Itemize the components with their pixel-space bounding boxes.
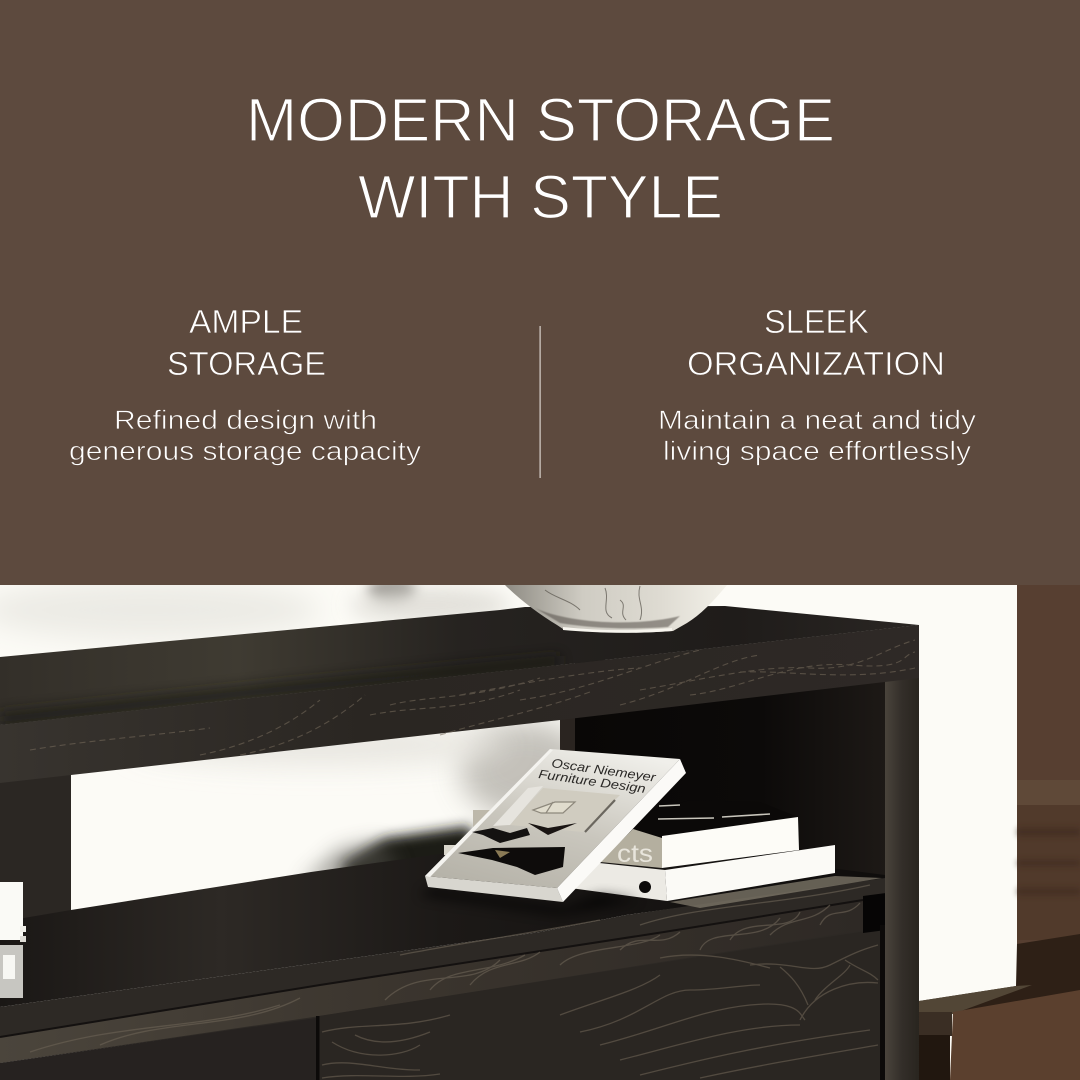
divider (540, 326, 541, 478)
lower shelf top (0, 860, 885, 1007)
title: MODERN STORAGE (246, 86, 835, 154)
book: Oscar Niemeyer (425, 749, 686, 902)
bowl (505, 585, 727, 633)
feature: ample storage: AMPLE (189, 303, 303, 340)
left decor object (0, 882, 26, 998)
feature: sleek organization (658, 303, 977, 466)
book: upper (600, 800, 799, 868)
stacked books (444, 800, 882, 908)
feature: ample storage: STORAGE (167, 345, 326, 382)
feature: sleek organization: Maintain a neat and tidy (658, 405, 977, 435)
cabinet doors (0, 893, 886, 1080)
front rail (0, 878, 885, 1063)
right post (885, 678, 919, 1080)
feature: ample storage: Refined design with (114, 405, 377, 435)
right wood wall (1013, 585, 1080, 944)
panel: furniture scene (0, 578, 1080, 1080)
book: lower (444, 810, 882, 908)
title (246, 86, 835, 231)
inner back panel (560, 660, 885, 885)
wood step (919, 934, 1080, 1080)
book: upper: cts (617, 840, 653, 868)
book shadow (430, 886, 639, 912)
feature: ample storage (69, 303, 422, 466)
book title (538, 759, 656, 794)
top shelf front (0, 625, 919, 783)
wall (0, 578, 1017, 1080)
book artwork (458, 786, 620, 875)
feature: ample storage: generous storage capacity (69, 436, 422, 466)
top shelf surface (0, 606, 919, 725)
title: WITH STYLE (358, 163, 723, 231)
feature: sleek organization: ORGANIZATION (687, 345, 945, 382)
left post (0, 770, 71, 925)
panel: brown header (0, 0, 1080, 585)
book title: Oscar Niemeyer (551, 756, 657, 785)
feature: sleek organization: SLEEK (764, 303, 869, 340)
feature: sleek organization: living space effortlessly (663, 436, 972, 466)
book title: Furniture Design (538, 767, 647, 796)
